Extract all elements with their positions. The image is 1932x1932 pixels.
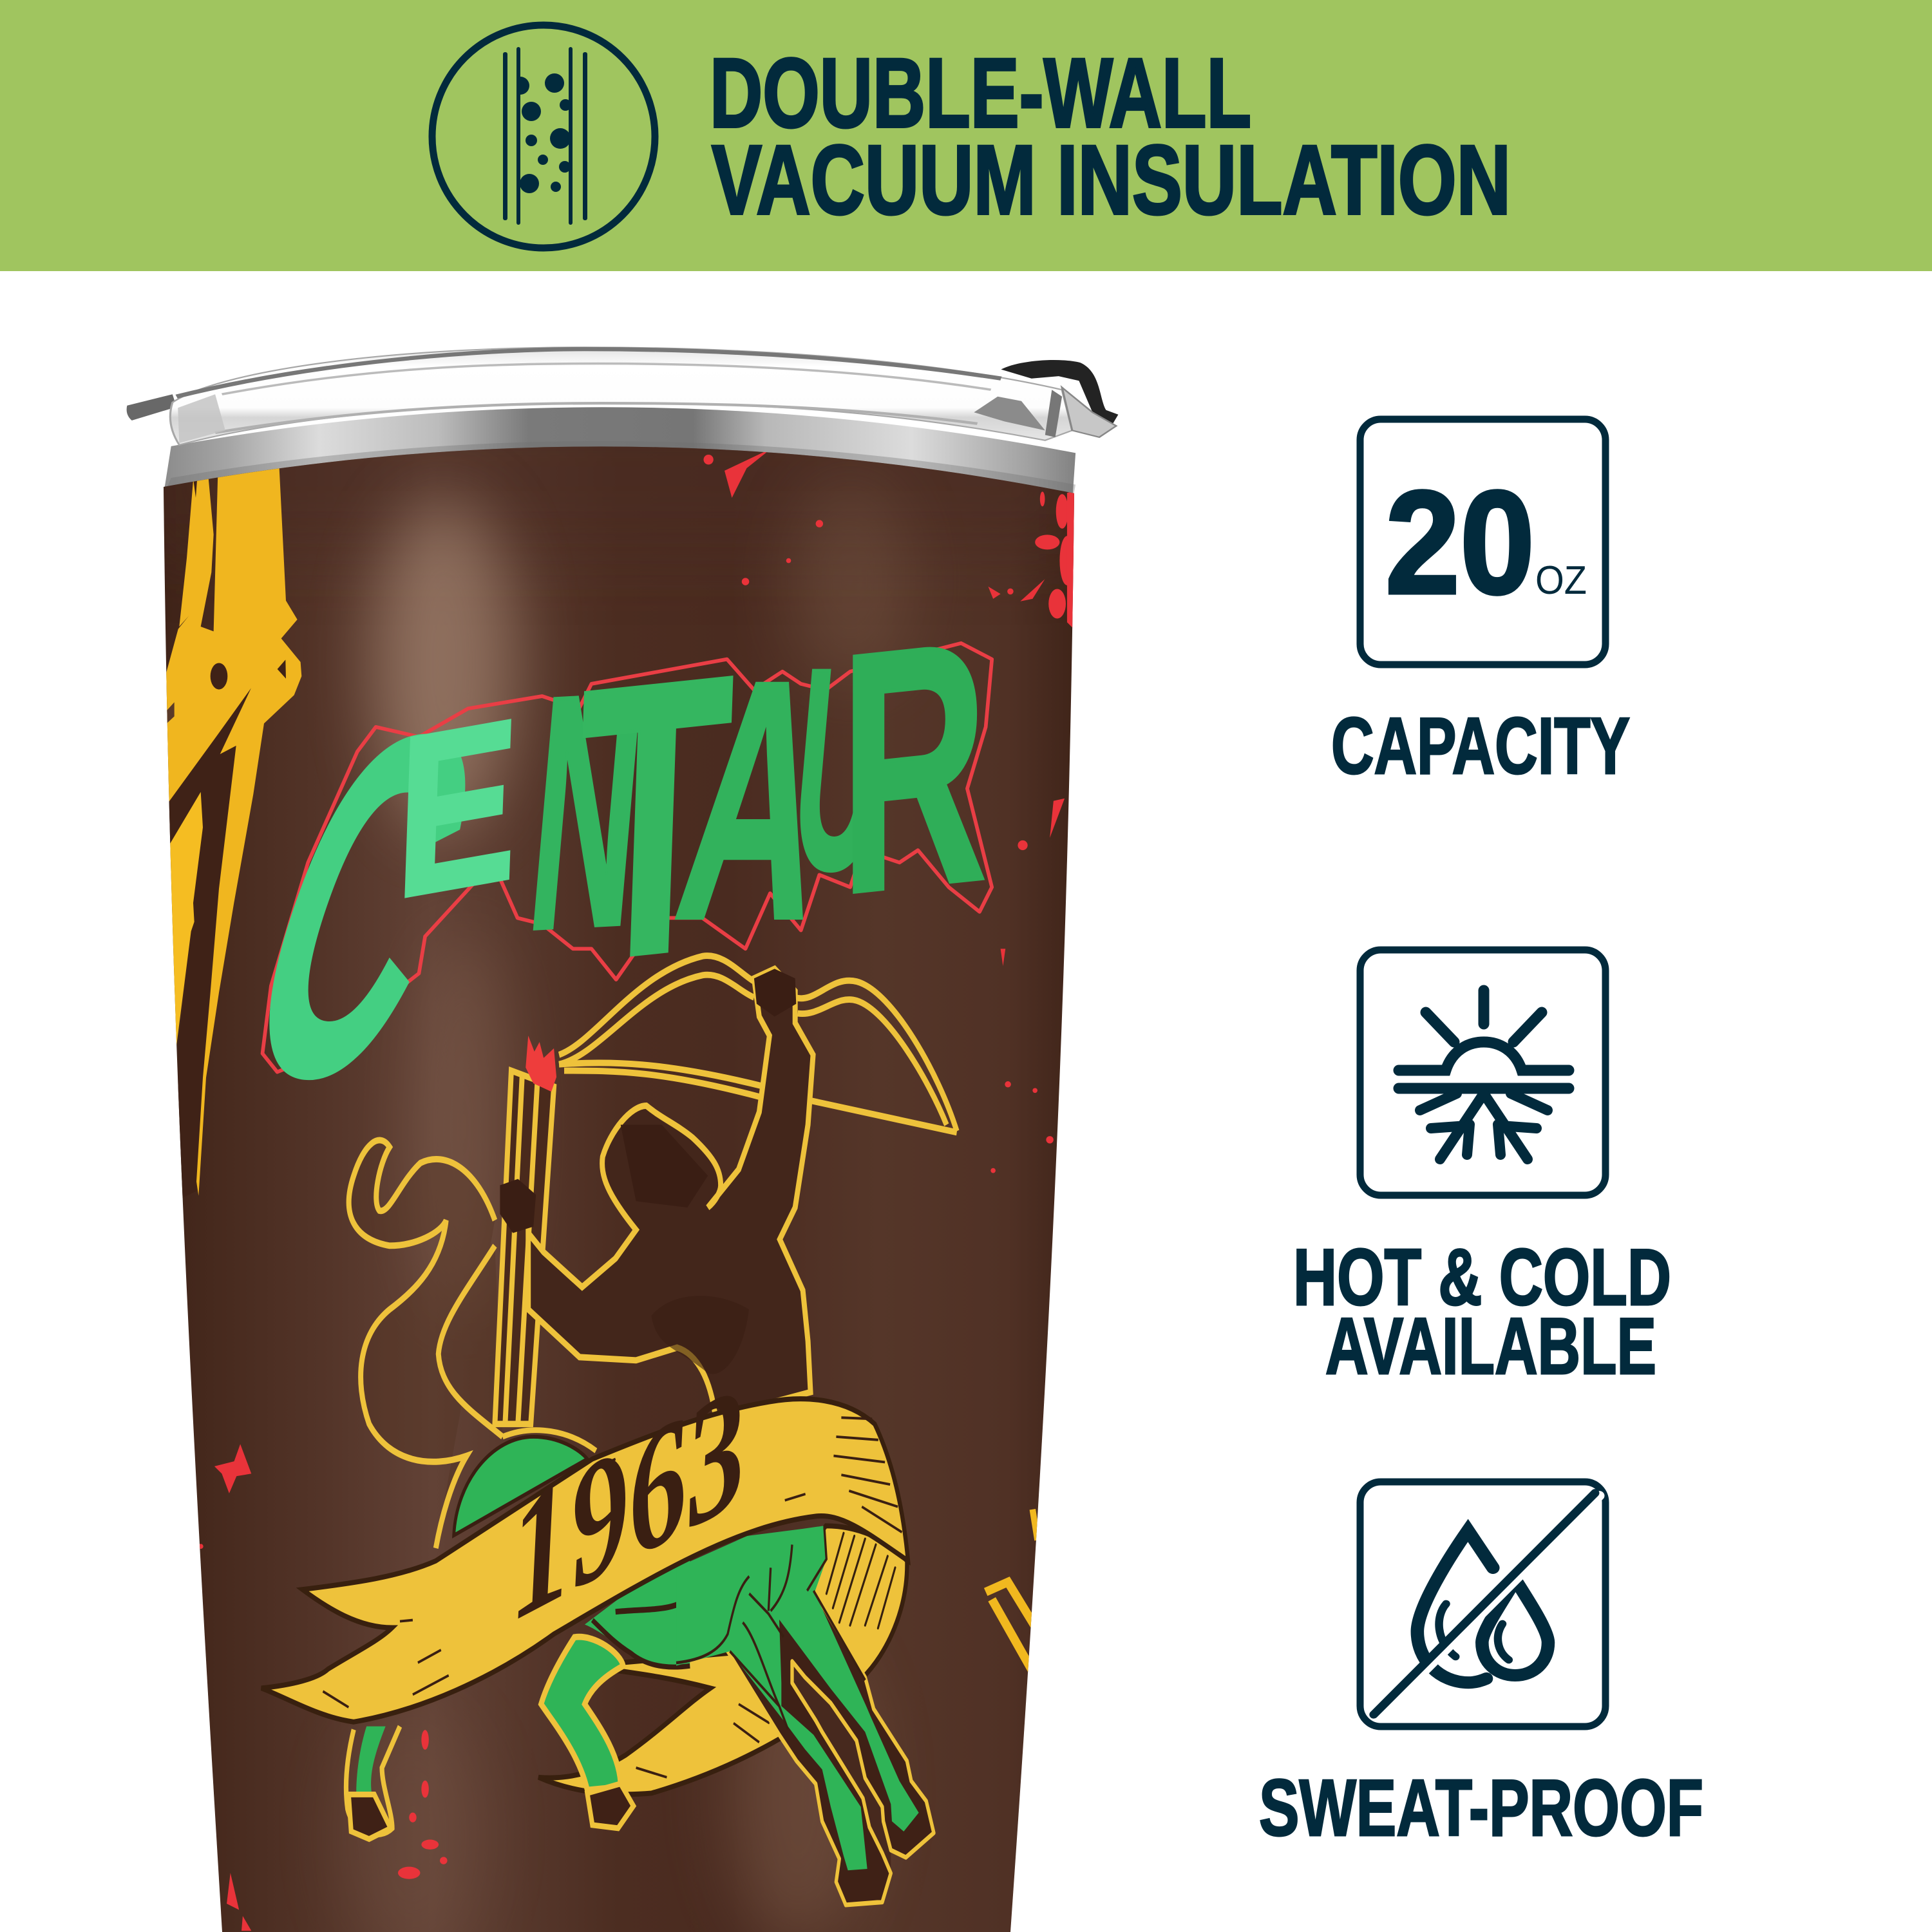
text: C <box>193 636 533 1177</box>
centaur saddle <box>454 1437 587 1535</box>
yellow graphic right <box>986 1582 1035 1676</box>
label: hot and cold available: AVAILABLE <box>1325 1302 1656 1391</box>
text: T <box>571 593 737 1043</box>
panel: capacity <box>1331 419 1630 791</box>
tumbler printed body <box>155 399 1082 1932</box>
centaur illustration <box>261 956 957 1905</box>
label: capacity: CAPACITY <box>1331 702 1630 791</box>
centaur bow <box>559 956 957 1132</box>
ribbon banner <box>261 1399 908 1722</box>
icon: double wall vacuum <box>432 25 655 248</box>
panel: sweat-proof <box>1259 1482 1703 1853</box>
tumbler <box>127 347 1118 1932</box>
horse rear legs and hip <box>676 1526 934 1905</box>
icon: sun and snowflake box <box>1360 950 1605 1195</box>
yellow graphic left <box>166 464 301 1200</box>
horse front leg <box>541 1637 623 1790</box>
red splatters <box>198 448 1075 1931</box>
text: E <box>392 670 522 947</box>
icon: 20 oz box: 20 <box>1385 461 1535 625</box>
panel: hot and cold <box>1293 950 1671 1391</box>
horse flank <box>585 1545 690 1668</box>
back ribbon <box>538 1526 907 1794</box>
icon: crossed water drops box <box>1360 1482 1605 1727</box>
text: A <box>661 610 850 990</box>
centaur human torso <box>528 969 813 1417</box>
label: hot and cold available: HOT & COLD <box>1293 1233 1671 1322</box>
lid clear body <box>170 347 1072 445</box>
heading: double-wall vacuum insulation: VACUUM INSULATION <box>712 125 1511 235</box>
text: R <box>840 569 987 966</box>
tumbler logo text <box>193 569 987 1177</box>
icon: 20 oz box: OZ <box>1535 558 1587 603</box>
heading: double-wall vacuum insulation: DOUBLE-WALL <box>710 38 1251 148</box>
label: sweat-proof: SWEAT-PROOF <box>1259 1764 1703 1853</box>
ribbon date: 1963 <box>505 1348 752 1656</box>
centaur flame <box>526 1036 556 1092</box>
tumbler lid <box>127 347 1118 445</box>
horse back leg left <box>356 1727 386 1793</box>
lid black hinge tab <box>1001 360 1118 424</box>
text: U <box>783 609 898 929</box>
icon: 20 oz box <box>1360 419 1605 665</box>
logo outline <box>263 643 992 1072</box>
centaur hands <box>500 1179 536 1233</box>
horse front hooves <box>348 1784 634 1839</box>
text: N <box>518 622 656 1000</box>
centaur tail <box>349 1141 502 1548</box>
tumbler steel ring <box>164 407 1075 503</box>
centaur torch column <box>495 1071 554 1424</box>
lid left tab <box>127 394 176 421</box>
header banner <box>0 0 1932 271</box>
